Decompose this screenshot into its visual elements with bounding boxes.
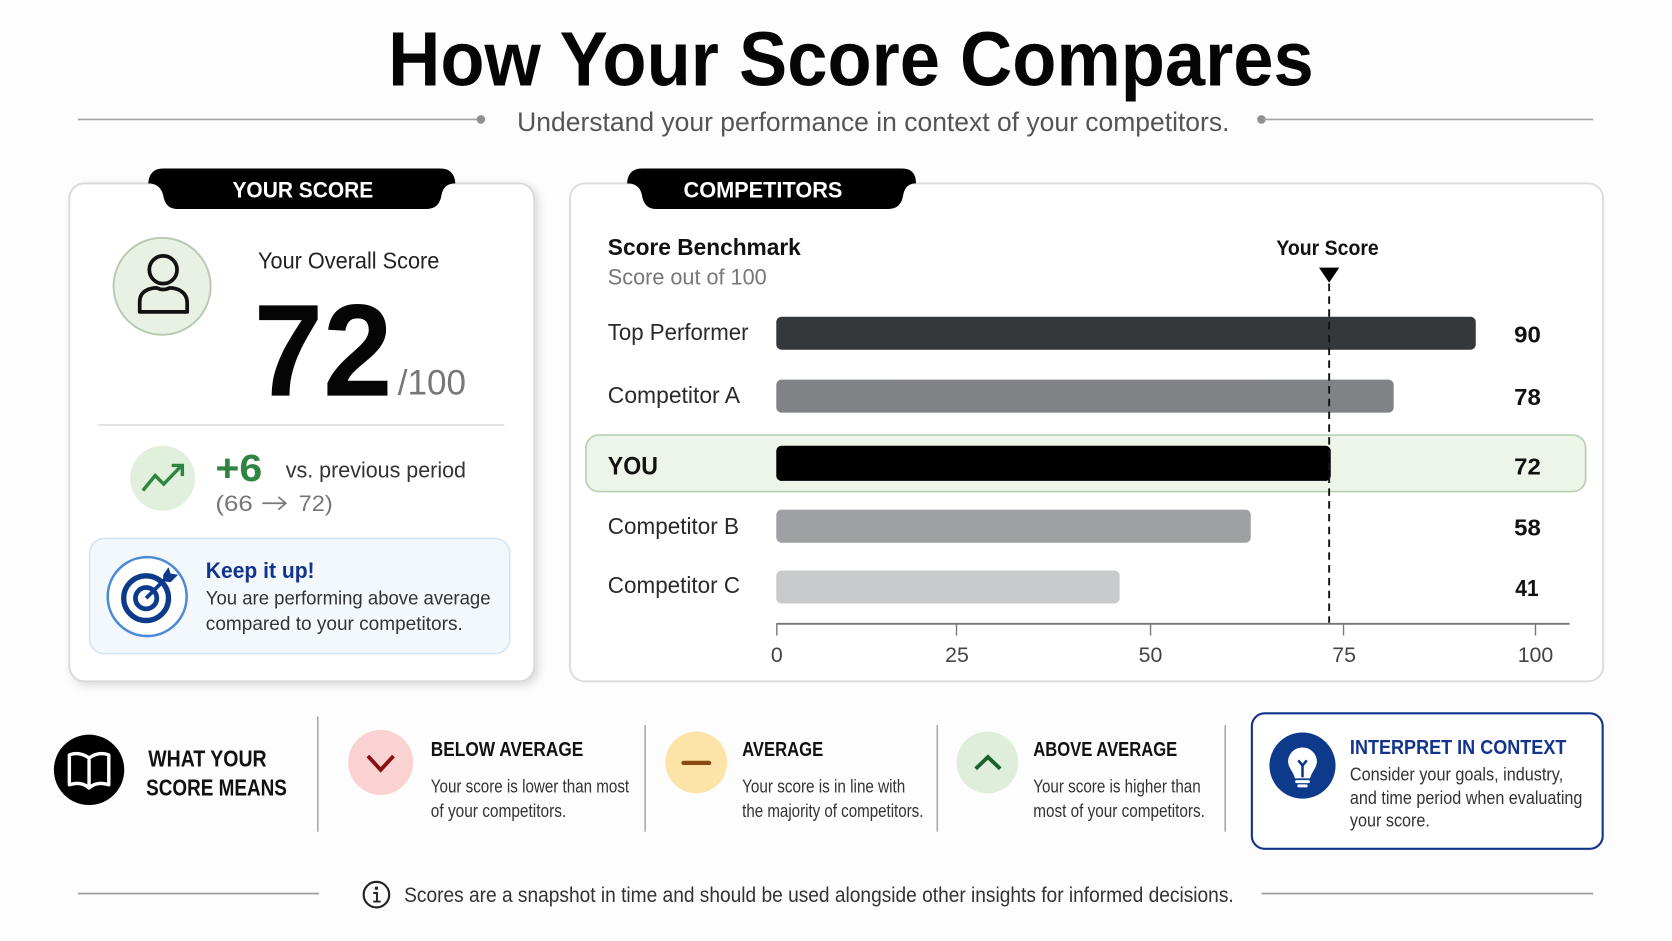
overall score label: Your Overall Score (258, 248, 439, 274)
legend: average: AVERAGE (742, 739, 823, 761)
bar: competitor b: Competitor B (608, 513, 739, 539)
panel: competitors (570, 168, 1603, 681)
legend: below average: BELOW AVERAGE (431, 739, 583, 761)
footer note (78, 882, 1593, 907)
bar: you (608, 446, 1541, 481)
bar: top performer: 90 (1514, 321, 1541, 347)
change vs previous period: +6 (215, 447, 262, 490)
subtitle: Understand your performance in context of your competitors. (517, 107, 1229, 137)
legend: below average: Your score is lower than most (431, 776, 629, 796)
legend: above average: Your score is higher than (1033, 776, 1201, 796)
legend: average (665, 731, 923, 821)
footer note: Scores are a snapshot in time and should be used alongside other insights for informed decisions. (404, 883, 1234, 907)
tab: your score (148, 168, 455, 209)
callout: interpret in context: Consider your goals, industry, (1350, 765, 1563, 785)
axis: 0 (771, 643, 783, 667)
title: How Your Score Compares (388, 17, 1314, 102)
callout: interpret in context: INTERPRET IN CONTEXT (1350, 737, 1567, 759)
heading: what your score means: WHAT YOUR (148, 746, 267, 772)
legend: above average: most of your competitors. (1033, 801, 1205, 821)
change vs previous period: (66 (215, 491, 253, 516)
legend: above average (956, 731, 1205, 821)
bar: competitor a: 78 (1514, 384, 1541, 410)
row highlight: you (586, 435, 1586, 492)
bar: top performer: Top Performer (608, 319, 749, 345)
change vs previous period: 72) (299, 491, 333, 516)
callout: keep it up: Keep it up! (206, 558, 315, 583)
chart heading: Score Benchmark (608, 234, 802, 260)
chart heading: Score out of 100 (608, 265, 767, 290)
icon: light bulb (1269, 733, 1336, 799)
legend: above average: ABOVE AVERAGE (1033, 739, 1177, 761)
tab: competitors (627, 168, 916, 209)
legend: below average: of your competitors. (431, 801, 566, 821)
score value (254, 277, 466, 424)
legend: average: the majority of competitors. (742, 801, 923, 821)
your score marker (1276, 236, 1379, 623)
bar: competitor b: 58 (1514, 514, 1541, 540)
bar: competitor b (608, 510, 1541, 543)
heading: what your score means: SCORE MEANS (146, 774, 287, 800)
axis: 25 (945, 643, 969, 667)
heading: what your score means (54, 735, 287, 805)
icon: trend up (130, 446, 195, 511)
tab: competitors: COMPETITORS (684, 177, 842, 202)
legend: average: Your score is in line with (742, 776, 905, 796)
bar: you: 72 (1514, 453, 1541, 479)
callout: keep it up: You are performing above average (206, 588, 491, 610)
tab: your score: YOUR SCORE (232, 177, 373, 202)
score value: /100 (398, 364, 466, 403)
callout: interpret in context (1252, 713, 1603, 849)
bar: you: YOU (608, 453, 658, 480)
bar: competitor c: Competitor C (608, 572, 740, 598)
callout: keep it up: compared to your competitors. (206, 613, 463, 635)
axis: 50 (1139, 643, 1163, 667)
axis: 100 (1518, 643, 1553, 667)
icon: person (114, 238, 211, 335)
bar: top performer (608, 317, 1541, 350)
bar: competitor c: 41 (1515, 575, 1539, 601)
callout: interpret in context: your score. (1350, 810, 1430, 830)
subtitle (78, 107, 1593, 137)
score value: 72 (254, 277, 392, 424)
bar: competitor c (608, 570, 1539, 604)
chart heading (608, 234, 802, 290)
bar: competitor a: Competitor A (608, 382, 741, 408)
your score marker: Your Score (1276, 236, 1379, 260)
callout: keep it up (90, 538, 510, 654)
change vs previous period: vs. previous period (286, 458, 466, 483)
change vs previous period (215, 447, 466, 516)
bar chart (608, 317, 1570, 667)
axis: 75 (1332, 643, 1356, 667)
axis (771, 624, 1570, 667)
legend: below average (348, 730, 629, 821)
icon: target (108, 557, 187, 636)
panel: your score (69, 168, 534, 681)
callout: interpret in context: and time period when evaluating (1350, 788, 1582, 808)
bar: competitor a (608, 380, 1541, 413)
